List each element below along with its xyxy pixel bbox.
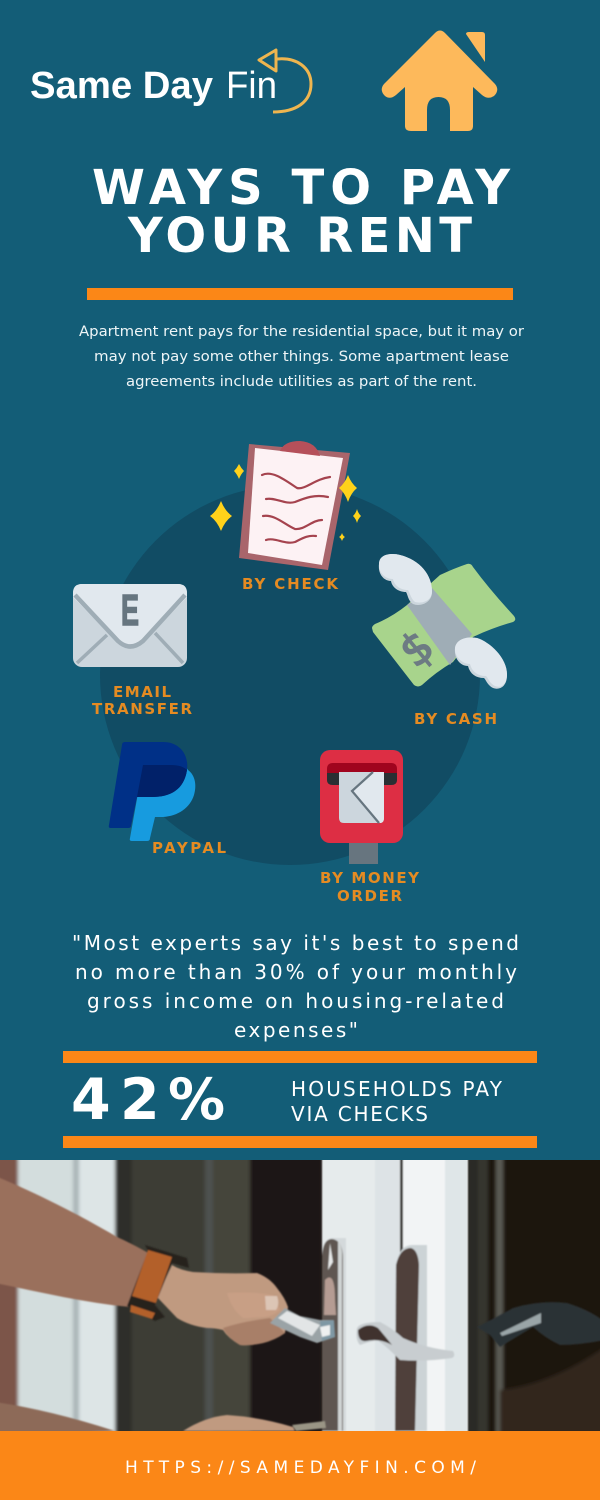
icon: post box: [320, 750, 403, 864]
quote: "Most experts say it's best to spend: [72, 931, 519, 955]
right handle: [356, 1322, 454, 1361]
forearm: [0, 1178, 148, 1308]
label: by cash: BY CASH: [414, 710, 497, 728]
logo: Fin: [226, 65, 277, 107]
icon: envelope: [73, 584, 187, 667]
door lever: [270, 1308, 335, 1343]
quote: no more than 30% of your monthly: [75, 960, 517, 984]
stat panel: VIA CHECKS: [291, 1102, 428, 1126]
logo: [30, 50, 311, 112]
quote: [72, 931, 519, 1042]
title: YOUR RENT: [127, 208, 472, 264]
intro paragraph: may not pay some other things. Some apartment lease: [94, 349, 509, 365]
label: by money order: BY MONEY: [320, 869, 420, 887]
label: by money order: [320, 869, 420, 905]
lower forearm: [0, 1402, 114, 1431]
background circle: [100, 485, 480, 865]
icon: sparkles: [210, 464, 361, 541]
label: by money order: ORDER: [337, 887, 402, 905]
title divider: [87, 288, 513, 300]
watch: [127, 1245, 189, 1321]
stat panel: HOUSEHOLDS PAY: [291, 1077, 503, 1101]
quote: expenses": [234, 1018, 358, 1042]
reflection: [477, 1302, 600, 1347]
icon: paypal logo: [109, 742, 195, 841]
hand: [157, 1265, 288, 1345]
door plate right: [397, 1245, 427, 1431]
label: email transfer: TRANSFER: [92, 700, 192, 718]
icon: flying money: $: [390, 621, 444, 678]
quote: gross income on housing-related: [87, 989, 504, 1013]
intro paragraph: agreements include utilities as part of the rent.: [126, 374, 477, 390]
stat panel: 42%: [71, 1067, 225, 1133]
label: email transfer: EMAIL: [113, 683, 171, 701]
icon: house: [382, 30, 497, 131]
title: [92, 160, 511, 264]
label: email transfer: [92, 683, 192, 718]
photo: hand opening door: [0, 1155, 600, 1440]
label: by check: BY CHECK: [242, 575, 339, 593]
title: WAYS TO PAY: [92, 160, 511, 216]
label: paypal: PAYPAL: [152, 839, 226, 857]
intro paragraph: Apartment rent pays for the residential space, but it may or: [79, 324, 524, 340]
footer bar: HTTPS://SAMEDAYFIN.COM/: [125, 1458, 476, 1478]
logo: Same Day: [30, 65, 213, 107]
stat panel: [63, 1051, 537, 1148]
icon: flying money: [372, 554, 515, 689]
lower hand: [183, 1415, 295, 1431]
icon: envelope: E: [121, 586, 139, 635]
door plate left: [330, 1238, 346, 1431]
footer bar: [0, 1431, 600, 1500]
intro paragraph: [79, 324, 524, 390]
icon: clipboard: [239, 441, 350, 570]
